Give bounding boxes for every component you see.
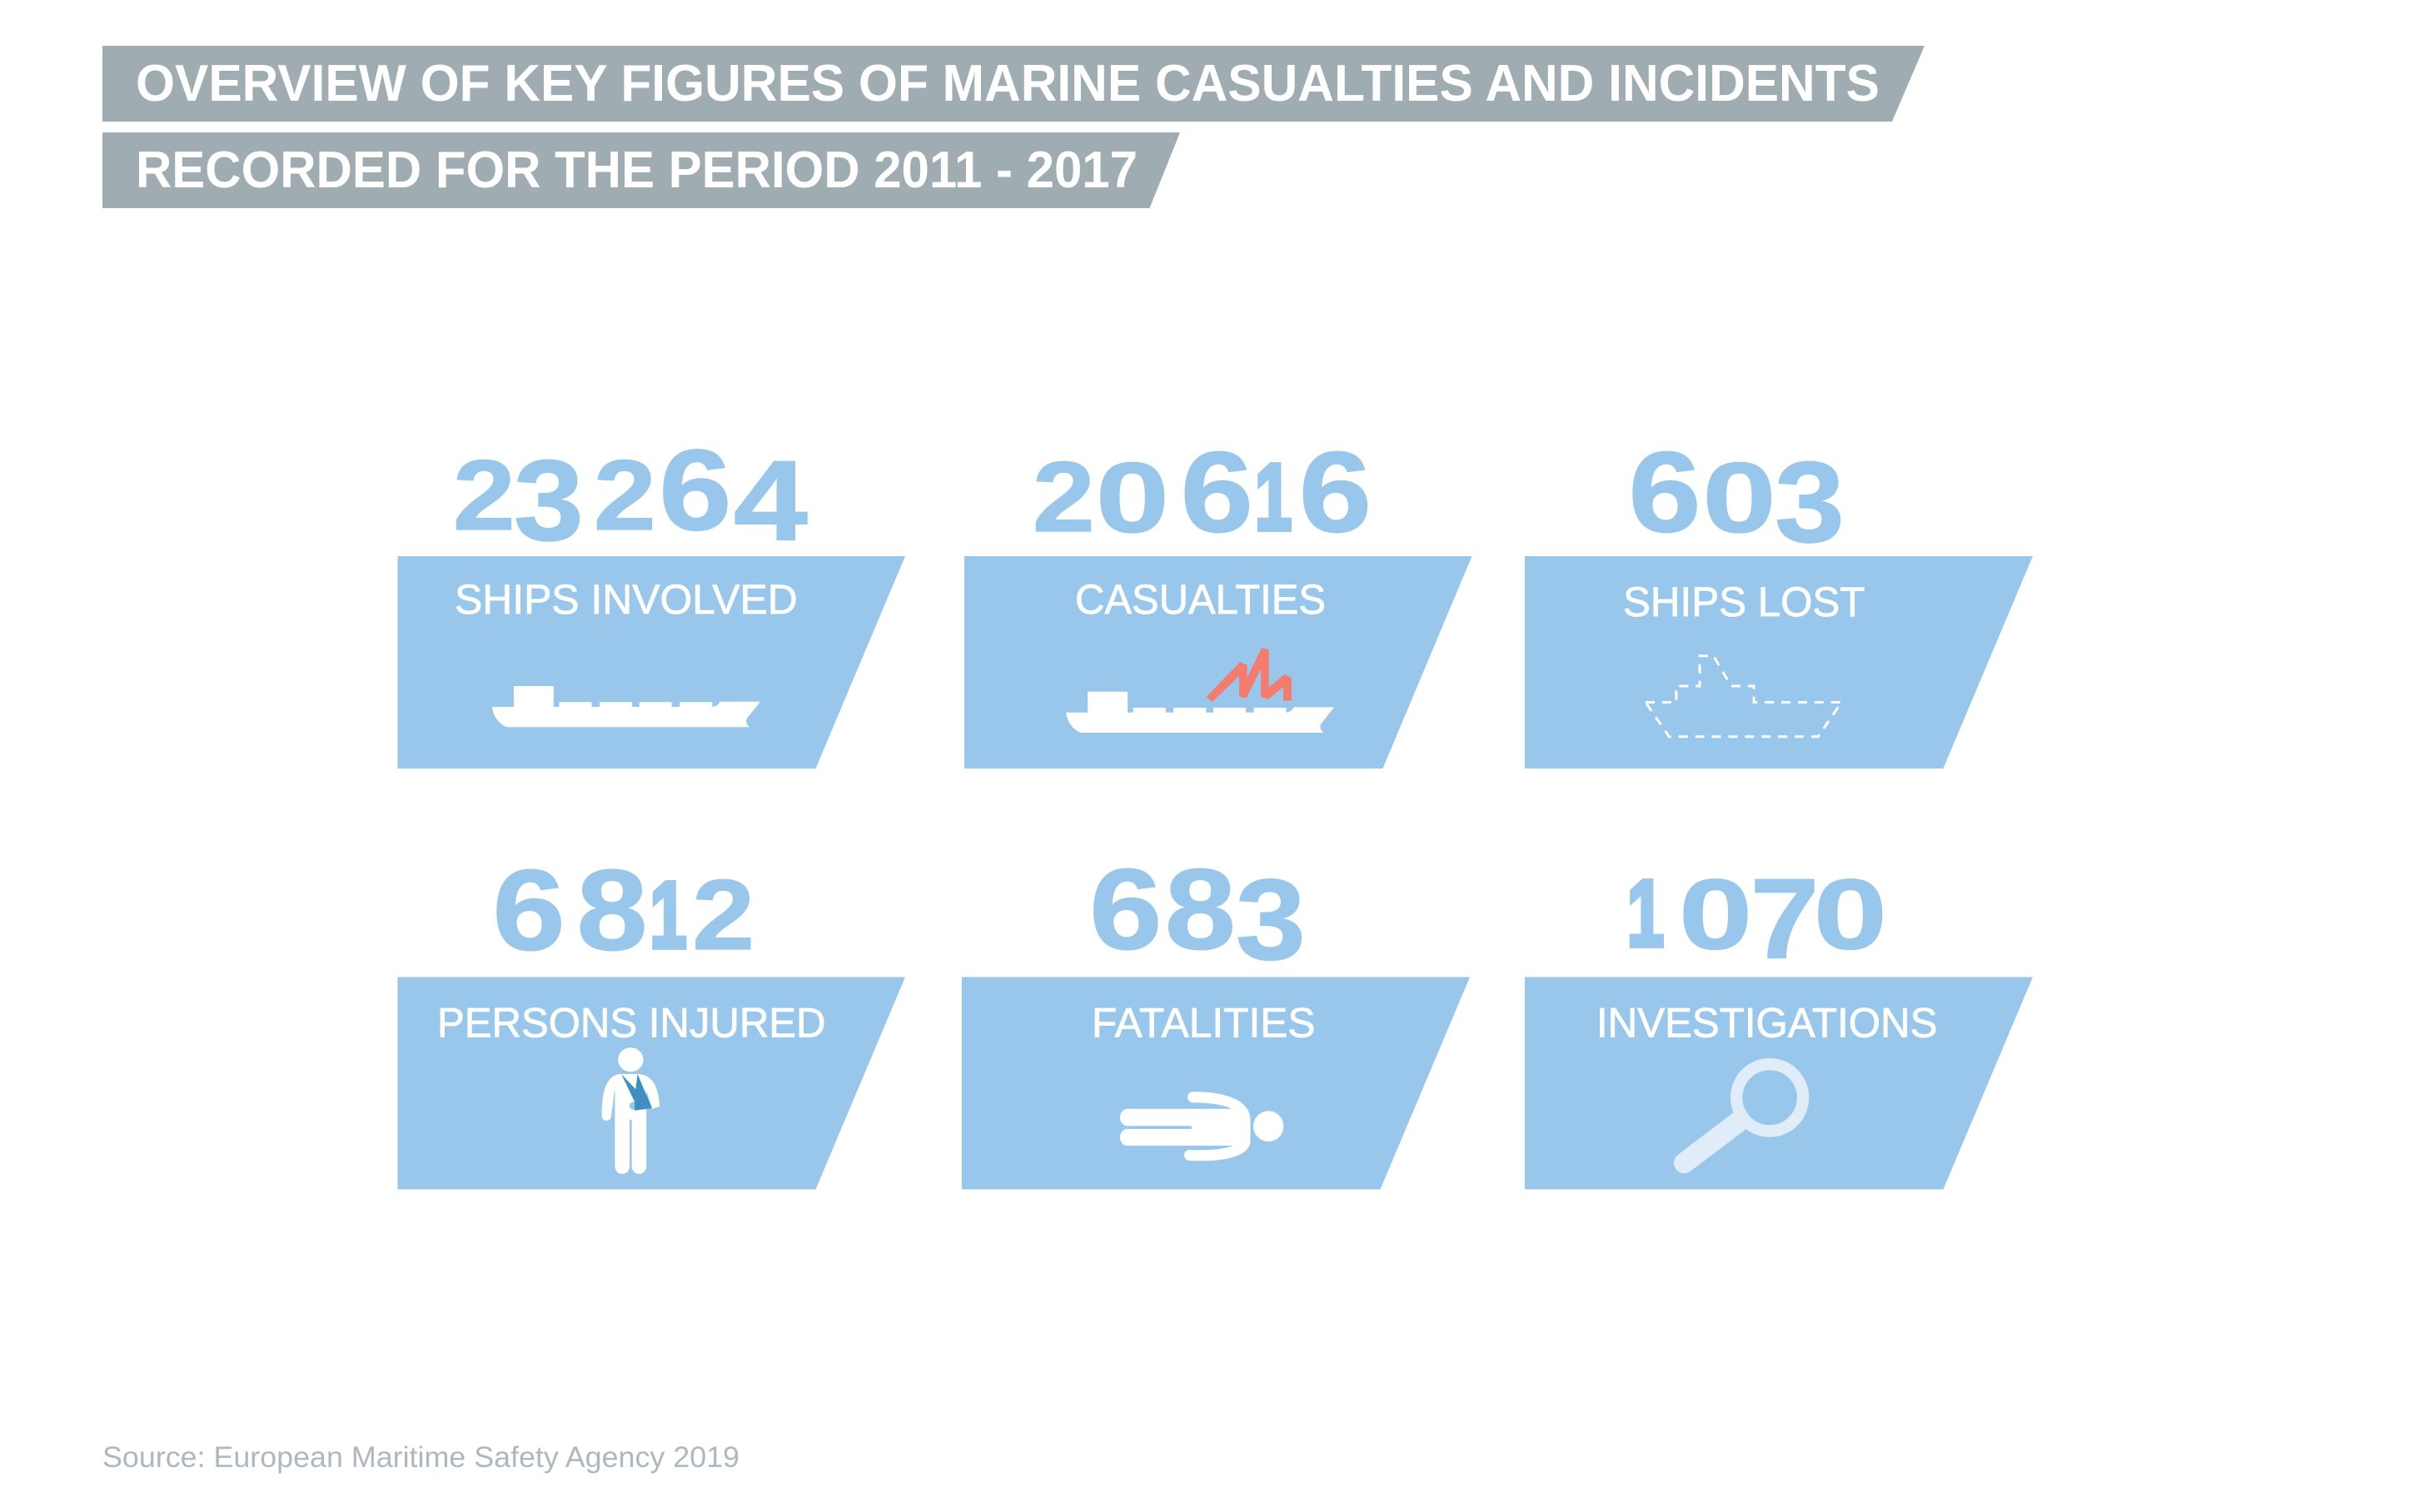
figure: 23 264	[453, 426, 808, 565]
figure: 603	[1628, 428, 1845, 566]
panel: fatalities	[962, 844, 1470, 1189]
figure: 1 070: 7	[1750, 855, 1820, 982]
panel: persons injured	[398, 845, 905, 1189]
icon: damaged ship	[1066, 648, 1334, 733]
figure: 20 616: 2	[1033, 441, 1095, 553]
label: SHIPS INVOLVED	[455, 576, 798, 623]
figure: 23 264: 3	[514, 436, 584, 565]
icon: magnifying glass	[1685, 1064, 1803, 1163]
title	[102, 46, 1925, 208]
figure: 23 264: 2	[594, 440, 656, 551]
card background	[1525, 977, 2033, 1189]
icon: lying figure	[1120, 1092, 1283, 1161]
panel: ships lost	[1525, 428, 2033, 768]
figure: 20 616: 6	[1181, 428, 1253, 556]
panel: investigations	[1525, 855, 2033, 1189]
card background	[398, 556, 905, 768]
figure: 23 264: 2	[453, 440, 515, 551]
label: CASUALTIES	[1075, 576, 1326, 623]
figure: 20 616: 6	[1299, 428, 1372, 556]
label: FATALITIES	[1092, 999, 1316, 1046]
figure: 23 264: 4	[734, 436, 808, 565]
figure: 1 070	[1627, 855, 1887, 982]
label: INVESTIGATIONS	[1596, 999, 1937, 1046]
title banner line 2: RECORDED FOR THE PERIOD 2011 - 2017	[136, 142, 1138, 199]
figure: 20 616: 1	[1255, 444, 1292, 550]
figure: 6 812: 6	[492, 846, 565, 974]
figure: 6 812: 1	[650, 862, 687, 967]
figure: 6 812: 2	[692, 859, 754, 971]
icon: injured person	[602, 1047, 660, 1174]
figure: 683: 3	[1236, 855, 1306, 984]
panel: ships involved	[398, 426, 905, 768]
icon: ship	[492, 686, 760, 727]
figure: 683: 6	[1089, 845, 1162, 973]
label: SHIPS LOST	[1623, 579, 1865, 625]
figure: 1 070: 1	[1627, 860, 1664, 966]
figure: 1 070: 0	[1679, 858, 1752, 970]
figure: 6 812: 8	[576, 845, 648, 974]
figure: 6 812	[492, 845, 754, 974]
label: PERSONS INJURED	[437, 999, 826, 1046]
icon: dashed ship outline	[1646, 656, 1841, 737]
figure: 20 616	[1033, 428, 1372, 556]
figure: 683	[1089, 844, 1306, 984]
source note: Source: European Maritime Safety Agency 2019	[102, 1441, 739, 1474]
card background	[962, 977, 1470, 1189]
title banner line 1: OVERVIEW OF KEY FIGURES OF MARINE CASUALTIES AND INCIDENTS	[136, 55, 1880, 112]
figure: 1 070: 0	[1814, 858, 1887, 970]
figure: 603: 0	[1702, 441, 1776, 554]
figure: 20 616: 0	[1096, 441, 1169, 554]
card background	[398, 977, 905, 1189]
figure: 603: 6	[1628, 428, 1701, 556]
figure: 23 264: 6	[659, 426, 732, 555]
card background	[1525, 556, 2033, 768]
card background	[964, 556, 1472, 768]
figure: 603: 3	[1775, 438, 1845, 566]
figure: 683: 8	[1165, 844, 1236, 973]
panel: casualties	[964, 428, 1472, 768]
